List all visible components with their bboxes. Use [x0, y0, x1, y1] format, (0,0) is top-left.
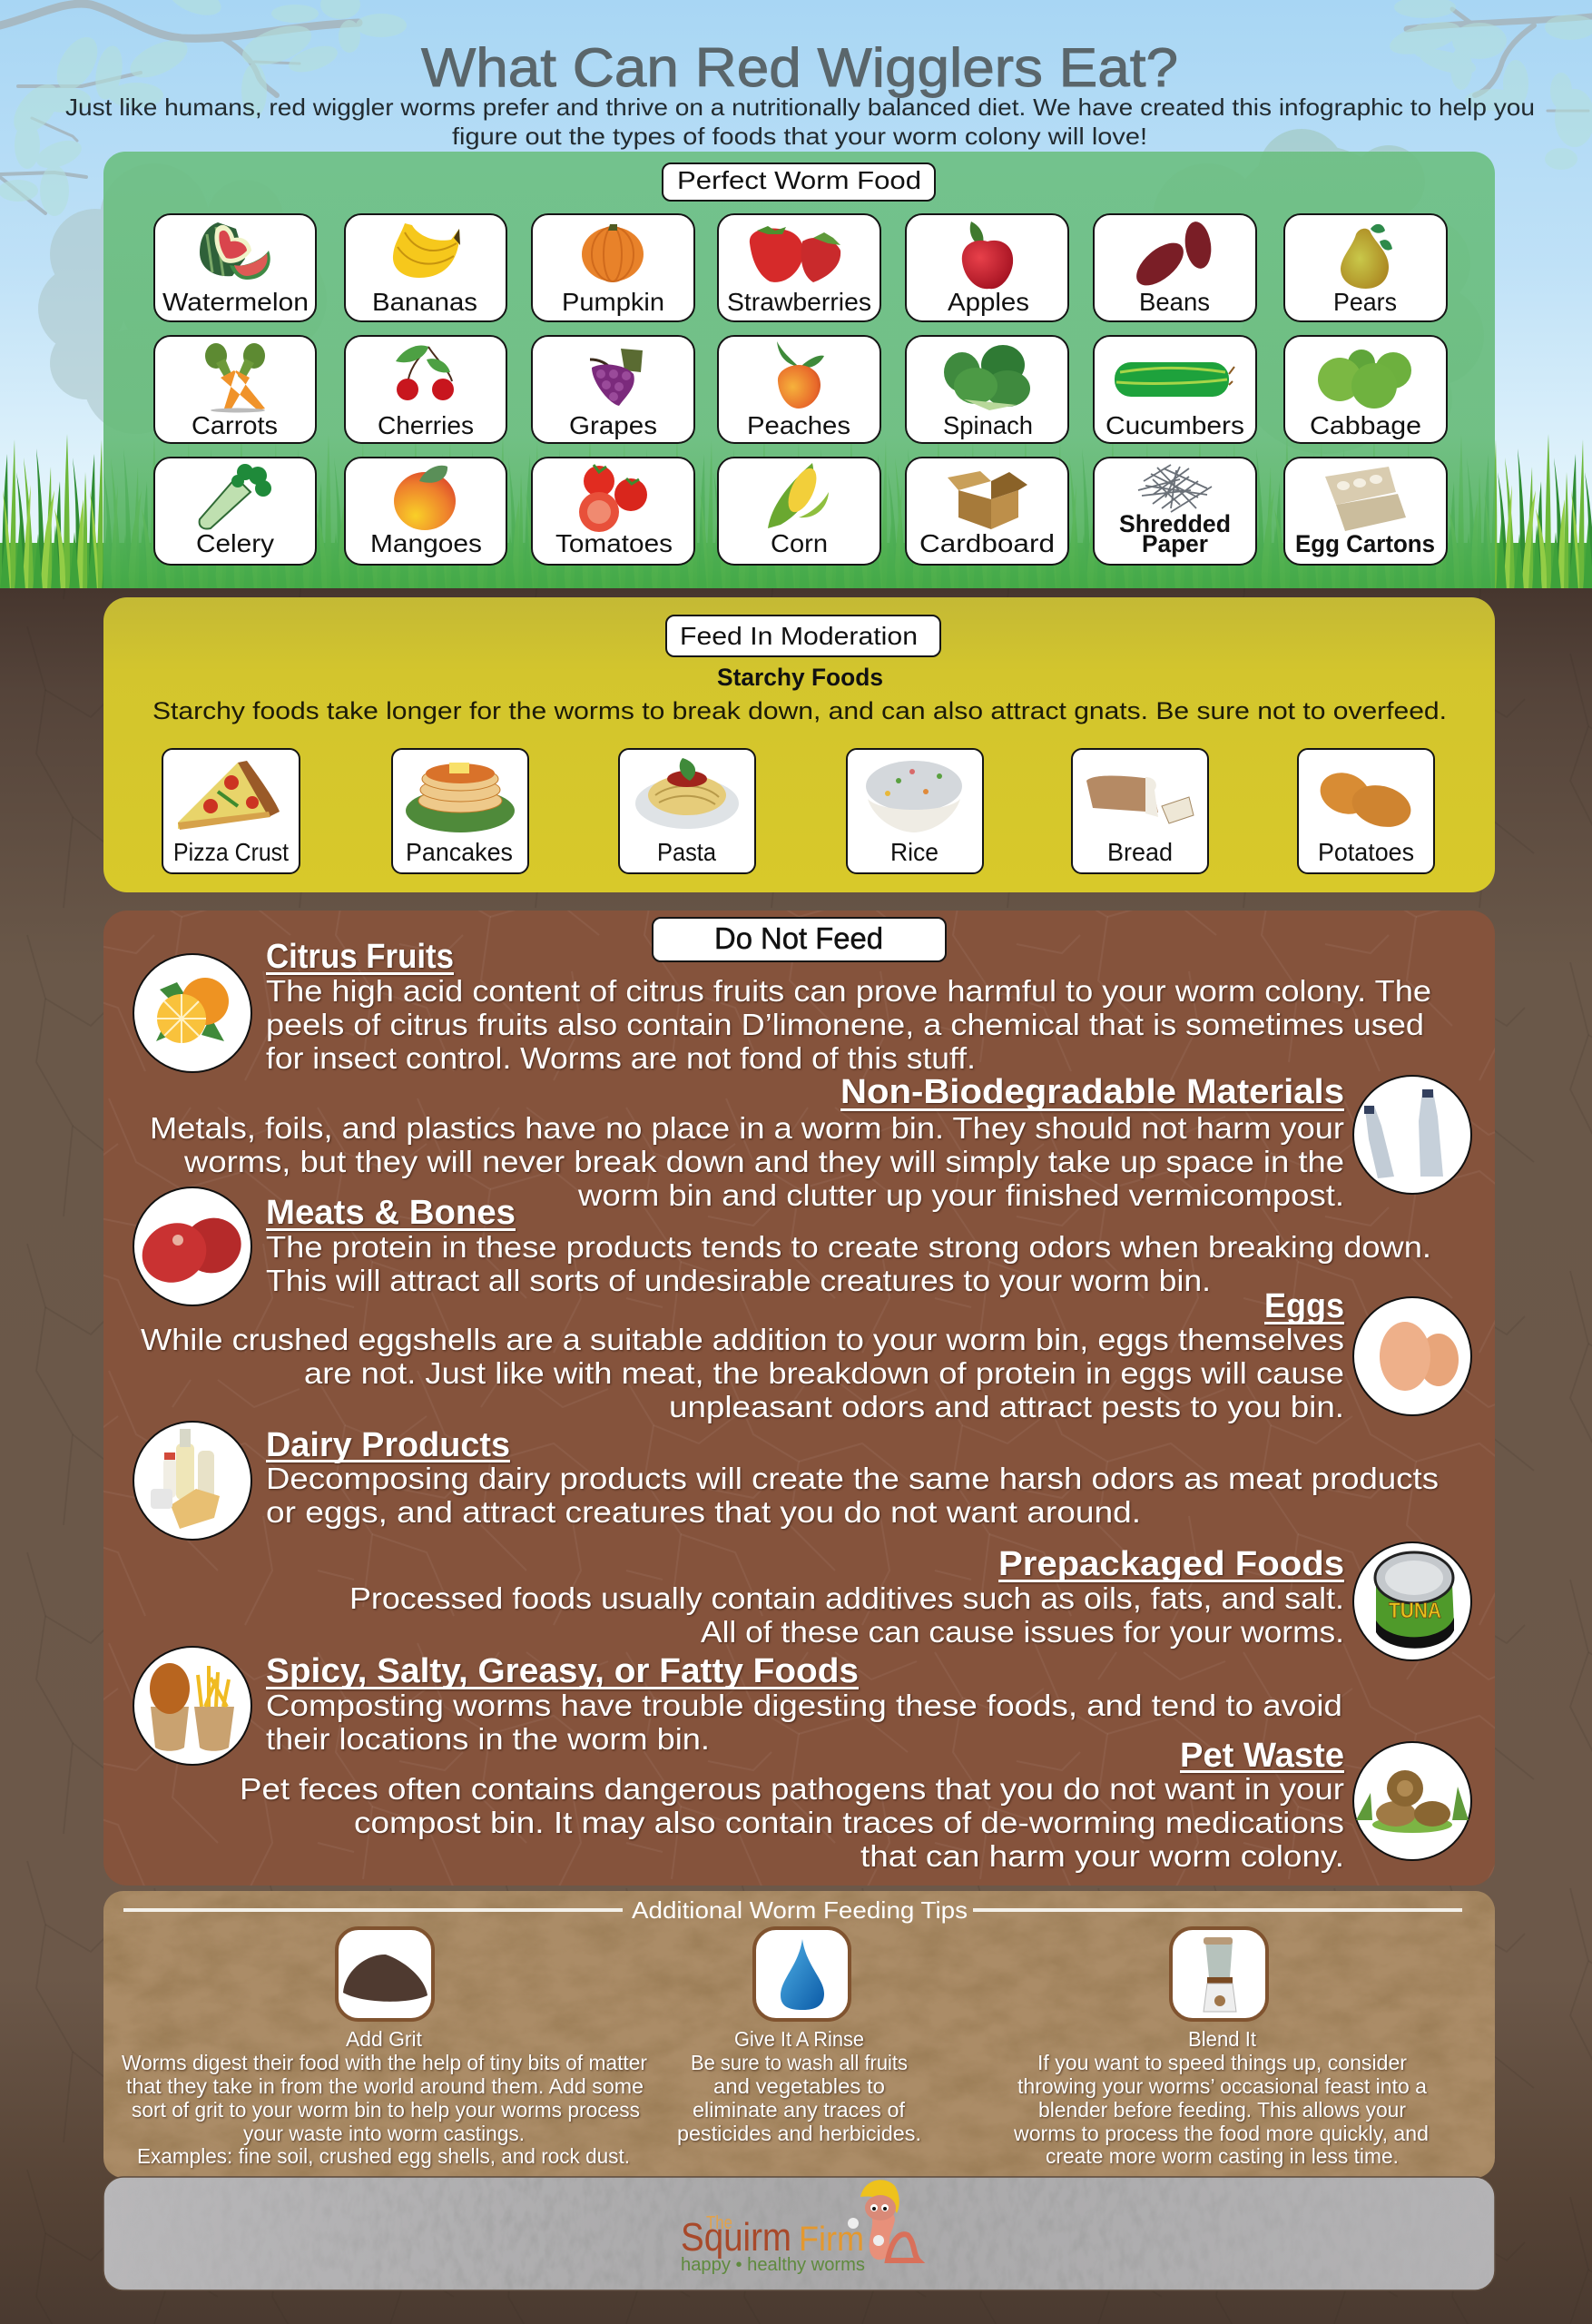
label: Bread [1107, 838, 1173, 866]
label: Beans [1139, 288, 1210, 316]
item: citrus fruits [133, 938, 1431, 1075]
heading: Citrus Fruits [266, 938, 454, 976]
icon: cucumber [1115, 362, 1234, 397]
text: throwing your worms’ occasional feast into a [1017, 2074, 1427, 2098]
item: pet waste [240, 1737, 1471, 1873]
icon: carrots [205, 343, 265, 412]
logo wordmark: Squirm [681, 2215, 791, 2260]
body text: worm bin and clutter up your finished vermicompost. [577, 1178, 1344, 1212]
icon: tuna can [1353, 1542, 1471, 1660]
logo wordmark [681, 2213, 865, 2275]
text: pesticides and herbicides. [677, 2122, 921, 2145]
card: corn [718, 458, 880, 565]
text: that they take in from the world around them. Add some [126, 2074, 644, 2098]
label: Carrots [192, 411, 278, 439]
tip: blend it [1013, 1928, 1429, 2168]
label: Tomatoes [555, 529, 673, 557]
card: pizza crust [162, 749, 300, 873]
body text [266, 1462, 1439, 1529]
icon: bread [1086, 775, 1194, 823]
card: beans [1094, 214, 1256, 321]
body text: peels of citrus fruits also contain D’limonene, a chemical that is sometimes used [266, 1008, 1424, 1041]
card: potatoes [1298, 749, 1434, 873]
icon: pasta [635, 758, 739, 829]
text: Be sure to wash all fruits [691, 2051, 908, 2074]
label: Watermelon [162, 288, 309, 316]
body text: Decomposing dairy products will create the same harsh odors as meat products [266, 1462, 1439, 1495]
heading: Meats & Bones [266, 1194, 516, 1232]
logo wordmark: happy • healthy worms [681, 2255, 865, 2275]
icon: cherries [396, 346, 454, 400]
icon: tomatoes [579, 465, 647, 532]
card: watermelon [154, 214, 316, 321]
icon: blender [1171, 1928, 1267, 2020]
icon: grapes [590, 349, 643, 406]
soil ground [0, 588, 1592, 2324]
card: grapes [532, 336, 694, 443]
body text [266, 1230, 1431, 1297]
icon: beans [1129, 220, 1214, 293]
body text: All of these can cause issues for your worms. [701, 1615, 1344, 1649]
heading: additional worm feeding tips [123, 1896, 1462, 1924]
icon: pear [1341, 224, 1392, 289]
icon: bananas [393, 223, 460, 278]
icon: citrus [133, 954, 251, 1072]
body text: While crushed eggshells are a suitable addition to your worm bin, eggs themselves [141, 1323, 1344, 1356]
card: pasta [619, 749, 755, 873]
icon: dairy [133, 1422, 251, 1540]
icon: peach [777, 341, 824, 409]
heading: Spicy, Salty, Greasy, or Fatty Foods [266, 1652, 859, 1690]
item: prepackaged foods [349, 1542, 1471, 1660]
icon: box [948, 471, 1027, 529]
label: Rice [890, 838, 938, 866]
panel: footer logo [103, 2177, 1495, 2290]
label: Strawberries [727, 288, 871, 316]
text: Worms digest their food with the help of tiny bits of matter [122, 2051, 647, 2074]
icon: strawberries [750, 226, 840, 282]
body text: This will attract all sorts of undesirable creatures to your worm bin. [266, 1264, 1211, 1297]
card: shredded paper [1094, 458, 1256, 565]
text: create more worm casting in less time. [1046, 2144, 1399, 2168]
heading: perfect worm food [663, 163, 935, 201]
text: Add Grit [346, 2027, 423, 2051]
body text: that can harm your worm colony. [860, 1839, 1344, 1873]
card: spinach [906, 336, 1068, 443]
icon: spinach [944, 345, 1030, 410]
icon: pancakes [406, 763, 515, 832]
icon: pet waste [1353, 1742, 1471, 1860]
card: egg cartons [1284, 458, 1447, 565]
item: eggs [141, 1287, 1471, 1423]
heading: additional worm feeding tips: Additional Worm Feeding Tips [632, 1896, 968, 1924]
panel: feed in moderation [103, 597, 1495, 892]
intro text [65, 94, 1535, 150]
body text [266, 1689, 1342, 1756]
text: If you want to speed things up, consider [1037, 2051, 1407, 2074]
body text: Processed foods usually contain additives such as oils, fats, and salt. [349, 1581, 1344, 1615]
card: shredded paper: Paper [1142, 530, 1208, 557]
label: Peaches [747, 411, 850, 439]
label: Spinach [943, 411, 1033, 439]
card: bread [1072, 749, 1208, 873]
text: eliminate any traces of [693, 2098, 906, 2122]
grass [0, 427, 1592, 590]
card: pumpkin [532, 214, 694, 321]
label: Cardboard [919, 529, 1055, 557]
text: Give It A Rinse [734, 2027, 864, 2051]
icon: eggs [1353, 1297, 1471, 1415]
label: Cabbage [1310, 411, 1421, 439]
card: celery [154, 458, 316, 565]
label: Shredded [1119, 510, 1231, 537]
icon: rice [866, 761, 962, 832]
label: Grapes [569, 411, 657, 439]
text: and vegetables to [713, 2074, 885, 2098]
heading: Non-Biodegradable Materials [840, 1073, 1344, 1111]
label: Pancakes [406, 838, 513, 866]
icon: pumpkin [582, 224, 644, 281]
icon: plastic bottles [1353, 1076, 1471, 1194]
text [1013, 2027, 1429, 2168]
label: Corn [771, 529, 828, 557]
icon: celery [200, 464, 271, 529]
card: bananas [345, 214, 506, 321]
card: rice [847, 749, 983, 873]
logo: the squirm firm [681, 2180, 919, 2275]
icon: corn [768, 463, 829, 528]
icon: soil pile [337, 1928, 433, 2020]
item: non-biodegradable materials [150, 1073, 1471, 1212]
card: cabbage [1284, 336, 1447, 443]
heading: Prepackaged Foods [998, 1545, 1344, 1583]
label: Pasta [657, 838, 716, 866]
heading: feed in moderation: Feed In Moderation [680, 622, 918, 650]
panel: perfect worm food [103, 152, 1495, 588]
card: pancakes [392, 749, 528, 873]
heading: Eggs [1264, 1287, 1344, 1325]
branches and leaves: right [1386, 0, 1592, 170]
description: Starchy foods take longer for the worms to break down, and can also attract gnats. Be sure not to overfeed. [152, 697, 1447, 724]
label: Mangoes [370, 529, 482, 557]
body text [349, 1581, 1344, 1649]
card: apples [906, 214, 1068, 321]
body text [150, 1111, 1344, 1212]
icon: water drop [754, 1928, 850, 2020]
label: Potatoes [1318, 838, 1414, 866]
heading: Dairy Products [266, 1426, 510, 1464]
body text: or eggs, and attract creatures that you do not want around. [266, 1495, 1141, 1529]
heading: feed in moderation [666, 615, 940, 656]
card: peaches [718, 336, 880, 443]
background trees [0, 0, 1592, 454]
body text: are not. Just like with meat, the breakdown of protein in eggs will cause [304, 1356, 1344, 1390]
label: Cucumbers [1106, 411, 1244, 439]
card: strawberries [718, 214, 880, 321]
body text: Pet feces often contains dangerous pathogens that you do not want in your [240, 1772, 1344, 1806]
card: cucumbers [1094, 336, 1256, 443]
text: your waste into worm castings. [243, 2122, 525, 2145]
body text: Composting worms have trouble digesting these foods, and tend to avoid [266, 1689, 1342, 1722]
label: Pizza Crust [173, 838, 289, 866]
item: dairy products [133, 1422, 1439, 1540]
body text: The high acid content of citrus fruits can prove harmful to your worm colony. The [266, 974, 1431, 1008]
text: Examples: fine soil, crushed egg shells, and rock dust. [137, 2144, 630, 2168]
label: Pears [1333, 288, 1397, 316]
title: What Can Red Wigglers Eat? [421, 37, 1178, 98]
label: Pumpkin [562, 288, 664, 316]
text: sort of grit to your worm bin to help your worms process [132, 2098, 640, 2122]
body text: for insect control. Worms are not fond of this stuff. [266, 1041, 976, 1075]
icon: mango [394, 466, 456, 530]
body text [141, 1323, 1344, 1423]
icon: potatoes [1314, 766, 1416, 833]
sky background [0, 0, 1592, 590]
branches and leaves: left [0, 0, 407, 216]
body text: The protein in these products tends to create strong odors when breaking down. [266, 1230, 1431, 1264]
label: Egg Cartons [1295, 530, 1435, 557]
heading: do not feed: Do Not Feed [714, 921, 883, 955]
icon: meat [133, 1187, 251, 1305]
text: Blend It [1188, 2027, 1257, 2051]
label: Bananas [372, 288, 477, 316]
text [122, 2027, 647, 2168]
card: tomatoes [532, 458, 694, 565]
body text: their locations in the worm bin. [266, 1722, 710, 1756]
body text: Metals, foils, and plastics have no place in a worm bin. They should not harm your [150, 1111, 1344, 1145]
body text [266, 974, 1431, 1075]
card: pears [1284, 214, 1447, 321]
icon: fries and chicken [133, 1647, 251, 1765]
text: blender before feeding. This allows your [1038, 2098, 1406, 2122]
heading: Pet Waste [1180, 1737, 1344, 1775]
tip: add grit [122, 1928, 647, 2168]
icon: pizza [178, 761, 280, 830]
card: cherries [345, 336, 506, 443]
item: spicy, salty, greasy, or fatty foods [133, 1647, 1342, 1765]
card: mangoes [345, 458, 506, 565]
intro text: figure out the types of foods that your worm colony will love! [452, 123, 1147, 150]
body text: unpleasant odors and attract pests to you bin. [669, 1390, 1344, 1423]
intro text: Just like humans, red wiggler worms prefer and thrive on a nutritionally balanced diet. We have created this infographic to help you [65, 94, 1535, 121]
icon: shredded paper [1138, 465, 1212, 512]
icon: egg carton [1325, 467, 1406, 531]
subheading: starchy foods: Starchy Foods [717, 664, 883, 691]
text [677, 2027, 921, 2145]
panel: do not feed [103, 911, 1495, 1886]
icon: tuna can: TUNA [1389, 1599, 1441, 1623]
card: cardboard [906, 458, 1068, 565]
logo wordmark: The [706, 2213, 732, 2233]
icon: cabbage [1318, 350, 1411, 409]
icon: watermelon [200, 222, 270, 280]
label: Cherries [378, 411, 474, 439]
body text: compost bin. It may also contain traces of de-worming medications [354, 1806, 1344, 1839]
logo mascot: worm with hard hat [848, 2180, 919, 2260]
text: worms to process the food more quickly, and [1013, 2122, 1429, 2145]
label: Apples [948, 288, 1029, 316]
logo wordmark: Firm [799, 2221, 864, 2259]
icon: apple [962, 222, 1013, 289]
heading: perfect worm food: Perfect Worm Food [677, 166, 921, 194]
body text [240, 1772, 1344, 1873]
tip: give it a rinse [677, 1928, 921, 2145]
panel: additional worm feeding tips [103, 1891, 1495, 2178]
label: Celery [196, 529, 274, 557]
heading: do not feed [653, 918, 946, 961]
card: carrots [154, 336, 316, 443]
body text: worms, but they will never break down and they will simply take up space in the [183, 1145, 1344, 1178]
item: meats and bones [133, 1187, 1431, 1305]
